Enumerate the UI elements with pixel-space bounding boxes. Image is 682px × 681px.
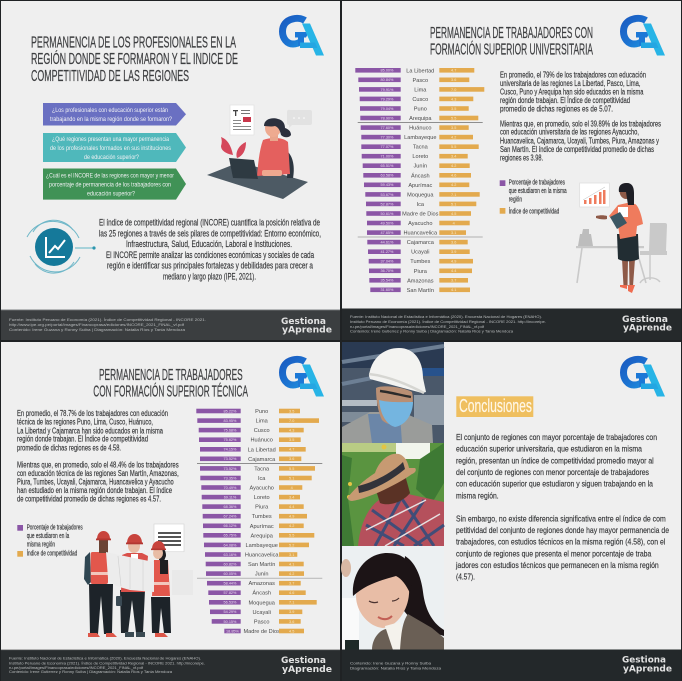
row: Cusco: 4.3 (289, 428, 294, 432)
row: Ica: 52.87% (381, 202, 394, 206)
row: La Libertad: La Libertad (406, 68, 434, 74)
row: Ucayali: 54.29% (224, 610, 237, 614)
row: Ucayali: 41.27% (381, 250, 394, 254)
row: Áncash: 4.6 (289, 591, 294, 595)
row: Moquegua: 7.1 (289, 601, 294, 605)
footer: yAprende (623, 324, 672, 334)
row: La Libertad (200, 447, 306, 453)
texto: conclusión 1: misma región. (456, 490, 499, 500)
row: Cajamarca: 73.52% (224, 457, 237, 461)
row: Piura (369, 268, 472, 275)
title: PERMANENCIA DE TRABAJADORES (99, 367, 243, 384)
texto: promedios técnica: Piura, Tumbes, Ucayali, Cajamarca, Huancavelica y Ayacucho (17, 477, 174, 486)
row: Madre de Dios (366, 211, 471, 218)
row: Pasco: 80.84% (381, 78, 394, 82)
texto: promedios universitaria: regiones es 3.98. (500, 154, 543, 163)
row: Piura: 68.36% (224, 505, 237, 509)
row: Arequipa (203, 533, 314, 539)
row: Tacna (200, 466, 315, 472)
bar chart: universitaria (355, 68, 484, 294)
row: Loreto (362, 154, 468, 160)
row: Junín: Junín (413, 164, 427, 170)
row: Áncash (363, 172, 471, 179)
row: Piura (202, 504, 304, 511)
photo: ingeniero con casco y mascarilla (342, 342, 444, 443)
row: Madre de Dios: Madre de Dios (244, 629, 280, 635)
photo: agricultor con sombrero (342, 443, 444, 546)
row: Ayacucho: Ayacucho (249, 486, 274, 492)
row: Arequipa (360, 116, 478, 122)
row: Madre de Dios: 18.85% (226, 629, 240, 633)
row: Ica: 5.1 (451, 202, 456, 206)
texto: definición INCORE: Infraestructura, Salud, Educación, Laboral e Instituciones. (126, 239, 292, 249)
row: Puno: 3.5 (289, 409, 294, 413)
logo GA (624, 359, 665, 396)
arrow: pregunta 3: educación superior? (87, 190, 135, 198)
row: Huánuco: Huánuco (409, 126, 432, 132)
row: Ayacucho: 49.50% (381, 221, 394, 225)
row: Huánuco (361, 125, 469, 132)
row: Loreto (202, 495, 300, 501)
row: Tumbes: Tumbes (252, 514, 272, 520)
footer: Fuente: Instituto Nacional de Estadística e Informática (2020). Encuesta Nacional de Hogares (ENAHO). (350, 314, 542, 319)
row: Cusco: 75.68% (224, 428, 237, 432)
texto: conclusión 1 (456, 432, 657, 500)
footer: Gestiona (622, 656, 666, 666)
row: La Libertad: 85.00% (381, 69, 394, 73)
footer: Diagramación: Natalia Ríos y Tania Mendoza (350, 666, 442, 671)
row: Ayacucho: Ayacucho (408, 221, 433, 227)
row: Tumbes: 4.9 (451, 260, 456, 264)
row: La Libertad: 4.7 (451, 69, 456, 73)
heading: Conclusiones (456, 396, 533, 417)
photo: mujer sonriendo (341, 546, 444, 650)
row: Tacna: Tacna (254, 466, 270, 472)
panel: formación superior técnica (1, 342, 340, 681)
texto: definición INCORE: las 25 regiones a través de seis pilares de competitividad: Entorno económico, (99, 228, 321, 238)
footer: Contenido: Irene Gutierrez y Ronny Suiba | Diagramación: Natalia Ríos y Tania Mendoza (350, 328, 514, 334)
row: Loreto: 69.11% (224, 496, 237, 500)
texto: promedios universitaria: promedio de dichas regiones es de 5.07. (500, 105, 613, 114)
row: Tumbes: 37.04% (381, 260, 394, 264)
row: San Martín: 60.82% (224, 562, 237, 566)
row: Piura: Piura (255, 505, 269, 511)
row: Apurímac: 59.43% (381, 183, 394, 187)
row: Lima: 79.91% (381, 88, 394, 92)
row: Moquegua: Moquegua (407, 192, 434, 198)
row: Cajamarca: 3.6 (451, 240, 456, 244)
row: Arequipa: Arequipa (250, 533, 274, 539)
row: Junín: 60.05% (224, 572, 237, 576)
row: Pasco: 50.15% (224, 620, 237, 624)
arrow: pregunta 1: ¿Los profesionales con educación superior están (52, 107, 168, 114)
texto: promedios técnica: Mientras que, en promedio, solo el 48.4% de los trabajadores (17, 460, 179, 469)
footer: Gestiona (622, 315, 668, 325)
texto: promedios técnica: técnica de las regiones Puno, Lima, Cusco, Huánuco, (17, 418, 153, 427)
illustration: tres trabajadores con plano (84, 524, 193, 637)
row: Piura: 4.4 (289, 505, 294, 509)
row: Cusco (199, 428, 304, 434)
row: Puno: Puno (255, 409, 268, 415)
arrow: pregunta 2 (43, 133, 186, 162)
row: Áncash: Áncash (411, 172, 430, 179)
row: Amazonas: Amazonas (407, 278, 434, 284)
bar chart: técnica (196, 409, 322, 635)
title: CON FORMACIÓN SUPERIOR TÉCNICA (93, 382, 248, 401)
row: Tumbes: 67.24% (224, 515, 237, 519)
row: Ayacucho (201, 485, 302, 492)
logo GA (624, 18, 665, 56)
row: Lima: Lima (256, 419, 269, 425)
row: Ayacucho (367, 221, 470, 227)
footer: Contenido: Irene Gutierrez y Ronny Suiba | Diagramación: Natalia Ríos y Tania Mendoza (9, 669, 173, 674)
row: Cajamarca: Cajamarca (248, 457, 276, 463)
arrow: pregunta 1 (43, 103, 186, 126)
title (430, 25, 593, 58)
logo GA (282, 359, 324, 396)
texto: promedios técnica: han estudiado en la misma región donde trabajan. El índice (17, 486, 172, 495)
row: Pasco (358, 78, 469, 84)
row: Huancavelica: 3.1 (451, 231, 456, 235)
arrow: pregunta 2: de los profesionales formados en sus instituciones (50, 145, 172, 152)
legend (17, 524, 83, 557)
row: Ica: Ica (258, 476, 266, 482)
heading: Conclusiones: Conclusiones (459, 396, 532, 416)
row: Tacna: Tacna (413, 145, 429, 151)
row: Tumbes: Tumbes (410, 259, 431, 265)
footer (1, 309, 340, 340)
row: Madre de Dios: 50.61% (381, 212, 394, 216)
row: La Libertad: La Libertad (248, 447, 276, 453)
row: Apurímac: Apurímac (250, 524, 274, 530)
row: Pasco: Pasco (413, 78, 428, 84)
row: Puno: 85.22% (224, 409, 237, 413)
legend: Índice de competitividad (27, 548, 77, 557)
row: Loreto: 71.00% (381, 155, 394, 159)
row: Lambayeque (361, 135, 473, 141)
panel: profesionales e índice de competitividad (1, 1, 340, 340)
row: Ayacucho: 4 (453, 221, 455, 225)
legend: Porcentaje de trabajadores (509, 180, 565, 187)
row: Lambayeque: 4.2 (451, 136, 456, 140)
texto: definición INCORE: región e identificar sus principales fortalezas y debilidades para crecer a (107, 261, 313, 271)
row: Huánuco: 75.62% (224, 438, 237, 442)
footer (342, 308, 681, 340)
texto: definición INCORE: El índice de competitividad regional (INCORE) cuantifica la posición relativa de (99, 218, 320, 228)
row: Moquegua (365, 192, 480, 198)
arrow: pregunta 2: ¿Qué regiones presentan una mayor permanencia (52, 136, 169, 143)
row: Tacna (361, 144, 479, 151)
row: Apurímac: 4.2 (289, 524, 294, 528)
row: San Martín: 4.1 (289, 562, 294, 566)
row: La Libertad: 4.7 (289, 448, 294, 452)
row: Cajamarca: 3.6 (289, 457, 294, 461)
row: Amazonas: 3.7 (451, 279, 456, 283)
footer: Gestiona (281, 317, 326, 327)
panel: formación superior universitaria (342, 1, 681, 340)
arrow: pregunta 3: ¿Cuál es el INCORE de las regiones con mayor y menor (46, 172, 175, 180)
footer: yAprende (282, 665, 332, 675)
texto: promedios universitaria: región donde trabajan. El Índice de competitividad (500, 96, 630, 105)
row: Cusco: 79.29% (381, 97, 394, 101)
title: COMPETITIVIDAD DE LAS REGIONES (31, 68, 189, 85)
row: Cajamarca (200, 456, 301, 463)
title: PERMANENCIA DE LOS PROFESIONALES EN LA (31, 34, 236, 52)
texto: promedios técnica: En promedio, el 78.7% de los trabajadores con educación (17, 409, 168, 418)
texto: promedios técnica: promedio de dichas regiones es de 4.58. (17, 443, 121, 452)
row: Huancavelica (205, 552, 297, 558)
row: Lima (197, 418, 319, 425)
row: Lima: 7.0 (451, 88, 456, 92)
row: Tumbes (369, 259, 473, 265)
row: Arequipa: 65.75% (224, 534, 237, 538)
row: Arequipa: Arequipa (409, 116, 432, 122)
row: Arequipa: 78.90% (381, 116, 394, 120)
row: Piura: Piura (414, 269, 428, 275)
row: Loreto: 3.4 (451, 155, 456, 159)
row: Loreto: Loreto (412, 154, 428, 160)
row: Cusco: Cusco (254, 428, 270, 434)
row: Cusco: Cusco (412, 97, 428, 103)
row: Madre de Dios: 4.5 (451, 212, 456, 216)
row: Amazonas: 3.7 (289, 582, 294, 586)
legend: misma región (27, 542, 55, 549)
legend: que estudiaron en la misma (509, 188, 567, 195)
row: Arequipa: 5.5 (289, 534, 294, 538)
row: Cajamarca (367, 240, 468, 246)
row: Moquegua: 56.53% (224, 601, 237, 605)
texto: definición INCORE: mediano y largo plazo (IPE, 2021). (163, 272, 256, 282)
row: Huancavelica: Huancavelica (404, 231, 438, 237)
row: Amazonas: 35.54% (381, 279, 394, 283)
row: Lima: Lima (414, 87, 427, 93)
row: Lima: 83.95% (224, 419, 237, 423)
footer (342, 650, 681, 681)
row: Áncash: Áncash (252, 590, 271, 597)
row: Cusco (360, 97, 473, 103)
row: Huánuco: 3.5 (451, 126, 456, 130)
legend: Índice de competitividad (509, 206, 559, 215)
row: Ica: 73.35% (224, 476, 237, 480)
footer: Contenido: Irene Guzana y Ronny Suiba (350, 661, 432, 666)
row: Áncash: 57.82% (224, 591, 237, 595)
row: Tacna: 5.5 (289, 467, 294, 471)
footer: http://www.ipe.org.pe/portal/images/Financoprasa/ediciones/INCORE_2021_FINAL_vf.pdf (9, 322, 185, 327)
row: Ucayali: 3.9 (289, 610, 294, 614)
footer: yAprende (623, 664, 672, 674)
row: San Martín: San Martín (407, 288, 434, 294)
texto: conclusión 2: (4.57). (456, 572, 475, 582)
row: Madre de Dios (224, 629, 304, 635)
row: Ica (366, 202, 476, 208)
row: Ayacucho: 70.49% (224, 486, 237, 490)
texto: promedios técnica: La Libertad y Cajamarca han sido educados en la misma (17, 426, 163, 435)
texto: promedios técnica: de competitividad promedio de dichas regiones es 4.57. (17, 495, 161, 504)
row: Ucayali (368, 249, 470, 256)
row: Junín: 65.51% (381, 164, 394, 168)
row: Puno: Puno (414, 106, 427, 112)
row: San Martín (370, 288, 470, 294)
row: Piura: 4.4 (451, 269, 456, 273)
row: Madre de Dios: 4.5 (289, 629, 294, 633)
row: Ucayali: Ucayali (411, 250, 429, 256)
title (93, 367, 248, 401)
row: Apurímac: 4.2 (451, 183, 456, 187)
row: Pasco: 3.6 (451, 78, 456, 82)
row: Apurímac: 66.12% (224, 524, 237, 528)
panel: conclusiones (341, 342, 681, 681)
row: Pasco: 3.6 (289, 620, 294, 624)
footer: Instituto Peruano de Economía (2021). Índice de Competitividad Regional - INCORE 2021. http://incoreipe. (9, 660, 205, 665)
row: Lima: 7.0 (289, 419, 294, 423)
row: Apurímac (364, 182, 469, 189)
row: Moquegua: Moquegua (248, 600, 276, 606)
row: Junín: Junín (255, 572, 269, 578)
row: Ica: Ica (417, 202, 425, 208)
row: Lambayeque (204, 543, 309, 549)
row: Lambayeque: Lambayeque (404, 135, 436, 141)
row: Tacna: 77.07% (381, 145, 394, 149)
footer (1, 649, 340, 681)
row: Cusco: 4.3 (451, 97, 456, 101)
row: Lambayeque: 64.08% (224, 543, 237, 547)
footer: Fuente: Instituto Peruano de Economía (2021). Índice de Competitividad Regional - INCORE 2021. (9, 317, 206, 322)
row: San Martín: 4.1 (451, 288, 456, 292)
row: Amazonas: Amazonas (248, 581, 275, 587)
row: Junín (206, 571, 304, 578)
row: Ucayali (210, 610, 302, 616)
footer: Gestiona (281, 656, 326, 666)
row: San Martín: San Martín (248, 562, 275, 568)
row: Ucayali: Ucayali (253, 610, 271, 616)
texto: conclusión 1: educación superior universitaria, que estudiaron en la misma (456, 444, 642, 454)
logo GA (282, 18, 324, 56)
row: Huánuco: Huánuco (250, 438, 273, 444)
row: Cajamarca: 44.61% (381, 240, 394, 244)
footer: ru.pe/portal/images/Financoprasa/ediciones/INCORE_2021_FINAL_vf.pdf (9, 665, 144, 670)
row: Tacna: 73.52% (224, 467, 237, 471)
row: Huancavelica: 47.65% (381, 231, 394, 235)
footer: Instituto Peruano de Economía (2021). Índice de Competitividad Regional - INCORE 2021. http://incoreipe. (350, 319, 546, 324)
legend: región (509, 197, 522, 204)
row: Ucayali: 3.9 (451, 250, 456, 254)
row: Piura: 36.70% (381, 269, 394, 273)
arrow: pregunta 3: porcentaje de permanencia de los trabajadores con (49, 182, 171, 188)
row: Arequipa: 5.5 (451, 116, 456, 120)
row: La Libertad (355, 68, 474, 74)
title: REGIÓN DONDE SE FORMARON Y EL INDICE DE (31, 49, 238, 68)
row: Loreto: Loreto (254, 495, 270, 501)
title (31, 34, 238, 85)
row: Huancavelica: 63.16% (224, 553, 237, 557)
texto: definición INCORE: El INCORE permite analizar las condiciones económicas y sociales de cada (106, 250, 314, 260)
row: Junín: 4.2 (289, 572, 294, 576)
texto: promedios técnica (17, 409, 179, 504)
row: Loreto: 3.4 (289, 496, 294, 500)
row: Moquegua: 53.67% (381, 193, 394, 197)
row: Tumbes: 4.9 (289, 515, 294, 519)
legend (500, 180, 567, 215)
row: Tacna: 5.5 (451, 145, 456, 149)
row: Ica (200, 476, 312, 482)
row: Lambayeque: Lambayeque (246, 543, 278, 549)
row: Áncash (208, 590, 306, 597)
texto: conclusión 2 (455, 513, 669, 582)
row: Lambayeque: 5.2 (289, 543, 294, 547)
row: Pasco: Pasco (254, 619, 269, 625)
row: Apurímac: Apurímac (408, 183, 432, 189)
row: Puno (360, 106, 469, 112)
arrow: pregunta 2: de educación superior? (84, 154, 139, 161)
row: Pasco (212, 619, 301, 625)
legend: que estudiaron en la (27, 533, 69, 540)
row: Huancavelica (367, 230, 466, 237)
illustration: mujer con laptop (207, 105, 312, 199)
row: Lima (359, 87, 484, 93)
row: Huánuco: 3.5 (289, 438, 294, 442)
row: Ayacucho: 4 (291, 486, 293, 490)
row: Huancavelica: Huancavelica (245, 552, 279, 558)
row: Amazonas: 58.44% (224, 582, 237, 586)
texto: promedios técnica: región donde trabajan. El Índice de competitividad (17, 435, 148, 444)
footer: Fuente: Instituto Nacional de Estadística e Informática (2020). Encuesta Nacional de Hogares (ENAHO). (9, 655, 201, 660)
row: Junín (363, 163, 470, 170)
footer: yAprende (282, 326, 332, 336)
row: Cajamarca: Cajamarca (407, 240, 435, 246)
illustration: mujer con tablero (576, 183, 667, 293)
row: La Libertad: 74.15% (224, 448, 237, 452)
row: Madre de Dios: Madre de Dios (402, 212, 439, 218)
footer: ru.pe/portal/images/Financoprasa/ediciones/INCORE_2021_FINAL_vf.pdf (350, 324, 485, 329)
texto: definición INCORE (99, 218, 321, 282)
row: Lambayeque: 77.30% (381, 136, 394, 140)
footer: Contenido: Irene Guzana y Ronny Suiba | Diagramación: Natalia Ríos y Tania Mendoza (9, 327, 186, 332)
row: Amazonas (207, 581, 301, 587)
row: Áncash: 63.58% (381, 174, 394, 178)
row: Apurímac (203, 524, 304, 530)
row: Amazonas (369, 278, 468, 284)
row: Tumbes (203, 514, 307, 520)
icon: gráfico de competitividad (27, 220, 96, 273)
legend: Porcentaje de trabajadores (27, 524, 83, 531)
row: Puno (196, 409, 300, 415)
row: Huánuco: 77.60% (381, 126, 394, 130)
row: Moquegua: 7.1 (451, 193, 456, 197)
arrow: pregunta 3 (43, 168, 186, 200)
texto: promedios técnica: con educación técnica de las regiones San Martín, Amazonas, (17, 469, 179, 478)
row: Junín: 4.2 (451, 164, 456, 168)
row: Áncash: 4.6 (451, 174, 456, 178)
row: Puno: 3.5 (451, 107, 456, 111)
row: Huánuco (199, 437, 301, 444)
row: Huancavelica: 3.1 (289, 553, 294, 557)
row: Puno: 79.04% (381, 107, 394, 111)
row: San Martín: 31.60% (381, 288, 394, 292)
row: San Martín (206, 562, 304, 568)
texto: promedios universitaria (500, 70, 661, 163)
row: Moquegua (209, 600, 317, 606)
arrow: pregunta 1: trabajando en la misma región donde se formaron? (50, 116, 172, 123)
row: Ica: 5.1 (289, 476, 294, 480)
